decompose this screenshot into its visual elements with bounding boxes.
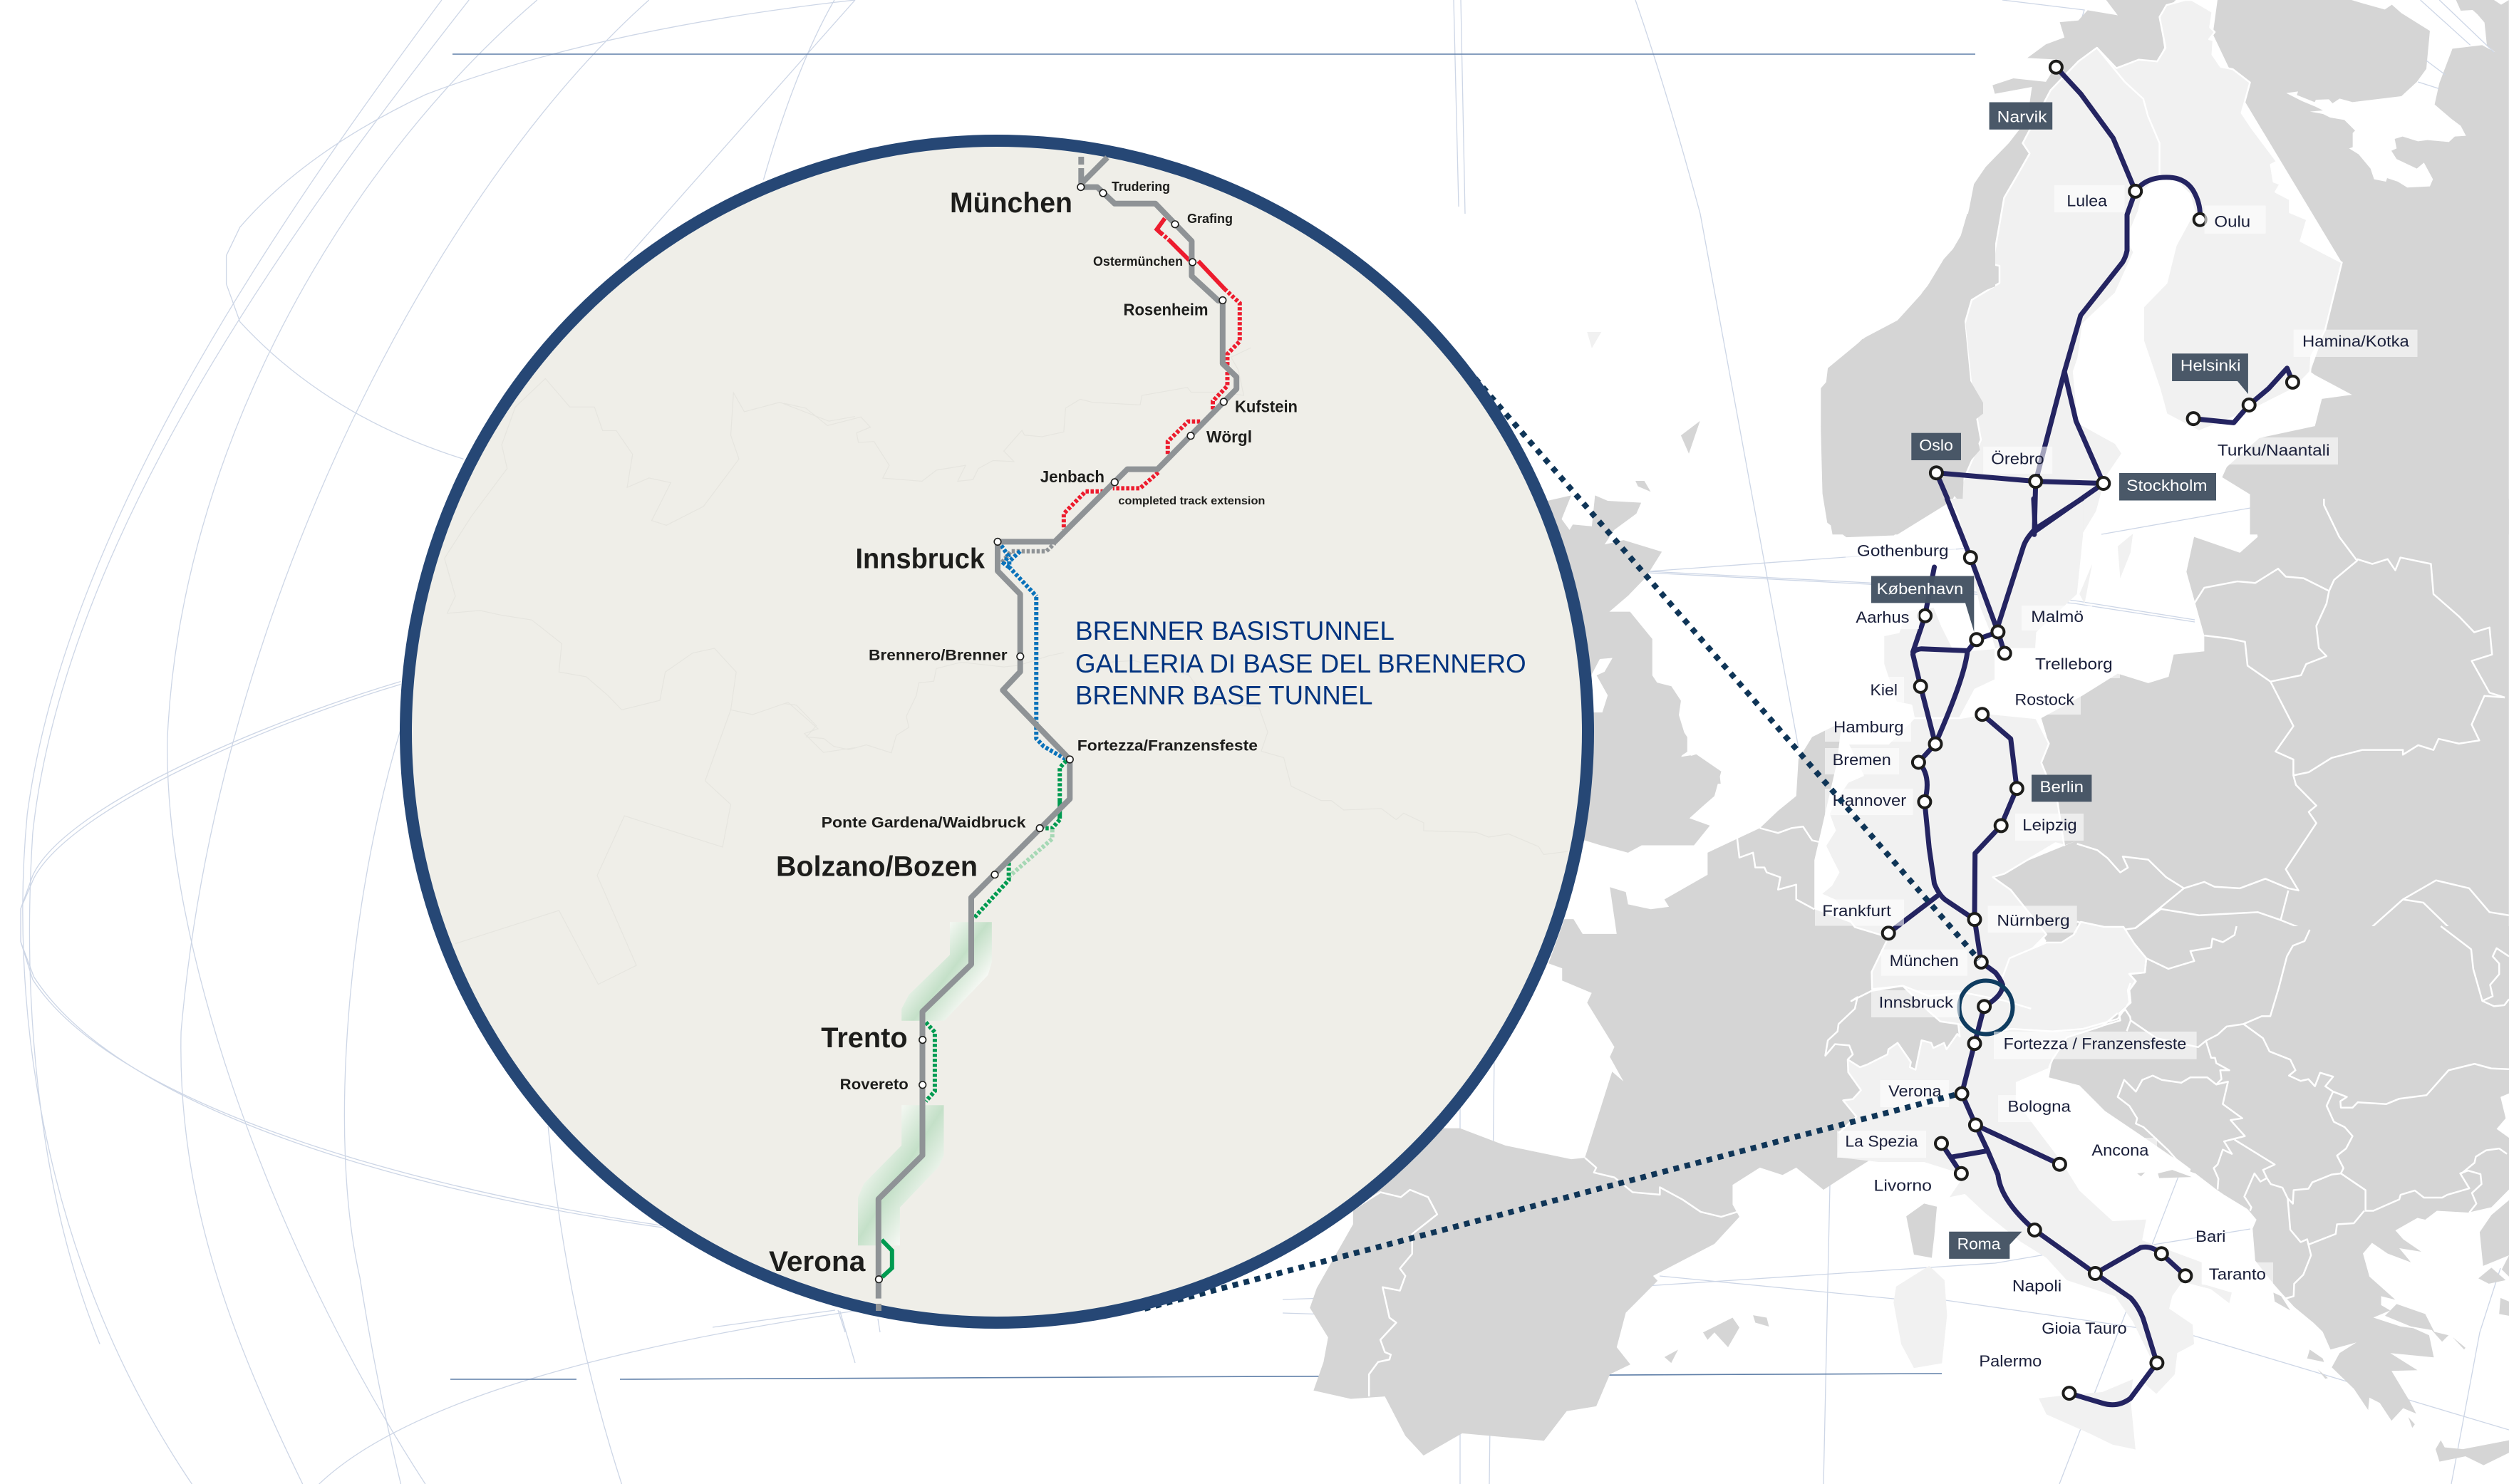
label: Stockholm [2119, 473, 2216, 500]
red track extension sections [1064, 218, 1240, 529]
inset station labels: Jenbach [1040, 467, 1105, 486]
map city labels [1815, 103, 2417, 1370]
label: København: København [1877, 580, 1963, 598]
green tunnel highlight lower [858, 1105, 943, 1245]
label: Ancona [2084, 1138, 2157, 1166]
label: Bremen [1825, 748, 1899, 774]
label: Kiel [1861, 677, 1904, 702]
land: France, Benelux and Iberia [1310, 712, 1965, 1456]
label: Napoli: Napoli [2012, 1277, 2061, 1295]
label: Trelleborg: Trelleborg [2035, 655, 2113, 673]
inset station labels: Grafing [1187, 212, 1233, 226]
inset station labels: Ponte Gardena/Waidbruck [822, 815, 1026, 831]
label: Turku/Naantali: Turku/Naantali [2218, 441, 2330, 459]
label: Lulea: Lulea [2066, 192, 2108, 209]
land: Austria [1995, 922, 2146, 997]
label: Hamina/Kotka: Hamina/Kotka [2302, 333, 2410, 351]
label: Bari: Bari [2195, 1228, 2225, 1245]
label: Frankfurt [1815, 899, 1904, 926]
land: Balkans, Greece and Turkey [2137, 926, 2509, 1465]
label: Livorno: Livorno [1874, 1176, 1932, 1194]
label: Roma: Roma [1957, 1235, 2001, 1252]
label: Narvik: Narvik [1997, 108, 2048, 125]
grey and blue dashed sections near Innsbruck [1001, 544, 1055, 596]
label: Innsbruck [1871, 990, 1960, 1017]
label: Innsbruck: Innsbruck [1879, 993, 1954, 1012]
label: Helsinki [2172, 353, 2248, 394]
Scandinavian-Mediterranean rail network [1888, 67, 2292, 1405]
label: Stockholm: Stockholm [2126, 477, 2208, 494]
network stations [1883, 61, 2299, 1399]
label: Leipzig [2015, 814, 2084, 841]
label: Taranto: Taranto [2209, 1265, 2266, 1283]
label: Berlin: Berlin [2039, 778, 2084, 796]
inset station labels: Innsbruck [855, 543, 986, 574]
inset station labels: Rovereto [840, 1076, 909, 1093]
tunnel title: GALLERIA DI BASE DEL BRENNERO [1075, 649, 1526, 678]
label: Verona [1881, 1080, 1949, 1107]
label: Hamburg [1825, 717, 1911, 742]
label: Trelleborg [2026, 651, 2120, 678]
label: Aarhus [1846, 603, 1919, 629]
label: Narvik [1990, 103, 2052, 130]
label: Oslo [1911, 433, 1961, 460]
label: Hamburg: Hamburg [1833, 718, 1904, 736]
label: Leipzig: Leipzig [2022, 816, 2077, 834]
inset station labels: Bolzano/Bozen [776, 851, 978, 882]
label: Örebro [1983, 447, 2052, 474]
label: Hamina/Kotka [2294, 330, 2417, 357]
borders: Balkans [2102, 926, 2509, 1299]
label: Malmö [2022, 606, 2092, 631]
inset circle: Brenner corridor [406, 141, 1588, 1322]
green access line sections [974, 761, 1066, 918]
inset station labels: Fortezza/Franzensfeste [1077, 738, 1258, 754]
label: Fortezza / Franzensfeste: Fortezza / Franzensfeste [2004, 1034, 2186, 1052]
label: La Spezia [1837, 1131, 1926, 1158]
label: Turku/Naantali [2211, 437, 2338, 465]
green tunnel highlight upper [901, 922, 992, 1021]
label: Örebro: Örebro [1991, 450, 2044, 468]
label: København [1871, 576, 1974, 632]
tunnel title: BRENNR BASE TUNNEL [1075, 680, 1372, 710]
frame line top [452, 53, 1975, 55]
existing grey rail line [879, 157, 1236, 1311]
label: Roma [1949, 1232, 2022, 1259]
label: Gioia Tauro: Gioia Tauro [2042, 1319, 2127, 1337]
label: Oslo: Oslo [1919, 437, 1953, 455]
label: Bologna: Bologna [2007, 1098, 2071, 1116]
label: Berlin [2032, 775, 2091, 801]
sea: White Sea and Barents inlet [2286, 0, 2509, 187]
label: Rostock: Rostock [2015, 690, 2075, 708]
label: Oulu [2205, 205, 2266, 234]
label: Fortezza / Franzensfeste [1994, 1032, 2197, 1059]
land: central and eastern Europe [1821, 499, 2509, 997]
dotted connector: inset circle to München [1475, 378, 1979, 960]
inset station labels: Wörgl [1206, 427, 1252, 446]
label: Nürnberg [1988, 906, 2077, 933]
label: Lulea [2054, 185, 2125, 212]
label: La Spezia: La Spezia [1845, 1133, 1918, 1150]
inset station labels [769, 180, 1298, 1277]
inset station labels: completed track extension [1118, 495, 1265, 507]
label: Malmö: Malmö [2031, 608, 2084, 626]
label: Frankfurt: Frankfurt [1822, 902, 1891, 920]
label: Bremen: Bremen [1833, 751, 1891, 769]
label: Rostock [2008, 689, 2081, 715]
inset station labels: Rosenheim [1123, 301, 1209, 319]
inset station labels: Trudering [1112, 180, 1170, 194]
map of Europe [1310, 0, 2509, 1465]
label: Hannover: Hannover [1833, 792, 1906, 809]
zoom ring around Innsbruck [1960, 980, 2012, 1034]
inset station labels: Verona [769, 1246, 866, 1277]
inset station labels: München [950, 187, 1072, 219]
label: Nürnberg: Nürnberg [1997, 912, 2070, 929]
tunnel title: BRENNER BASISTUNNEL [1075, 616, 1395, 645]
label: Oulu: Oulu [2214, 213, 2250, 231]
faint country borders in inset [445, 348, 1568, 985]
inset station labels: Ostermünchen [1093, 254, 1183, 269]
label: München [1881, 950, 1967, 976]
inset station labels: Trento [821, 1022, 908, 1054]
label: Gothenburg [1846, 537, 1956, 564]
frame line bottom [450, 1374, 1942, 1379]
inset station labels: Kufstein [1235, 398, 1298, 416]
tunnel title [1075, 616, 1526, 710]
inset panel and ring [406, 141, 1588, 1322]
land: Balkans west part [2049, 983, 2220, 1188]
land: Norway, Sweden, Finland and Russia north [1821, 0, 2509, 534]
land: southern Norway, Britain and North Atlantic islands [1477, 214, 1995, 784]
land: Italy and islands [1826, 983, 2232, 1450]
inset station labels: Brennero/Brenner [869, 647, 1008, 663]
label: Kiel: Kiel [1870, 681, 1898, 699]
label: Taranto [2202, 1262, 2273, 1285]
label: Bologna [1998, 1095, 2079, 1122]
inset stations [876, 184, 1227, 1282]
label: Helsinki: Helsinki [2180, 357, 2240, 375]
label: Aarhus: Aarhus [1856, 608, 1910, 626]
label: Hannover [1825, 789, 1913, 815]
label: Gothenburg: Gothenburg [1857, 541, 1948, 559]
label: Verona: Verona [1888, 1082, 1942, 1100]
label: Ancona: Ancona [2091, 1141, 2149, 1159]
label: Palermo: Palermo [1979, 1352, 2042, 1370]
label: München: München [1890, 952, 1959, 970]
dotted connector: inset circle to Verona [1144, 1094, 1960, 1309]
blue tunnel dashed section [1036, 597, 1066, 759]
